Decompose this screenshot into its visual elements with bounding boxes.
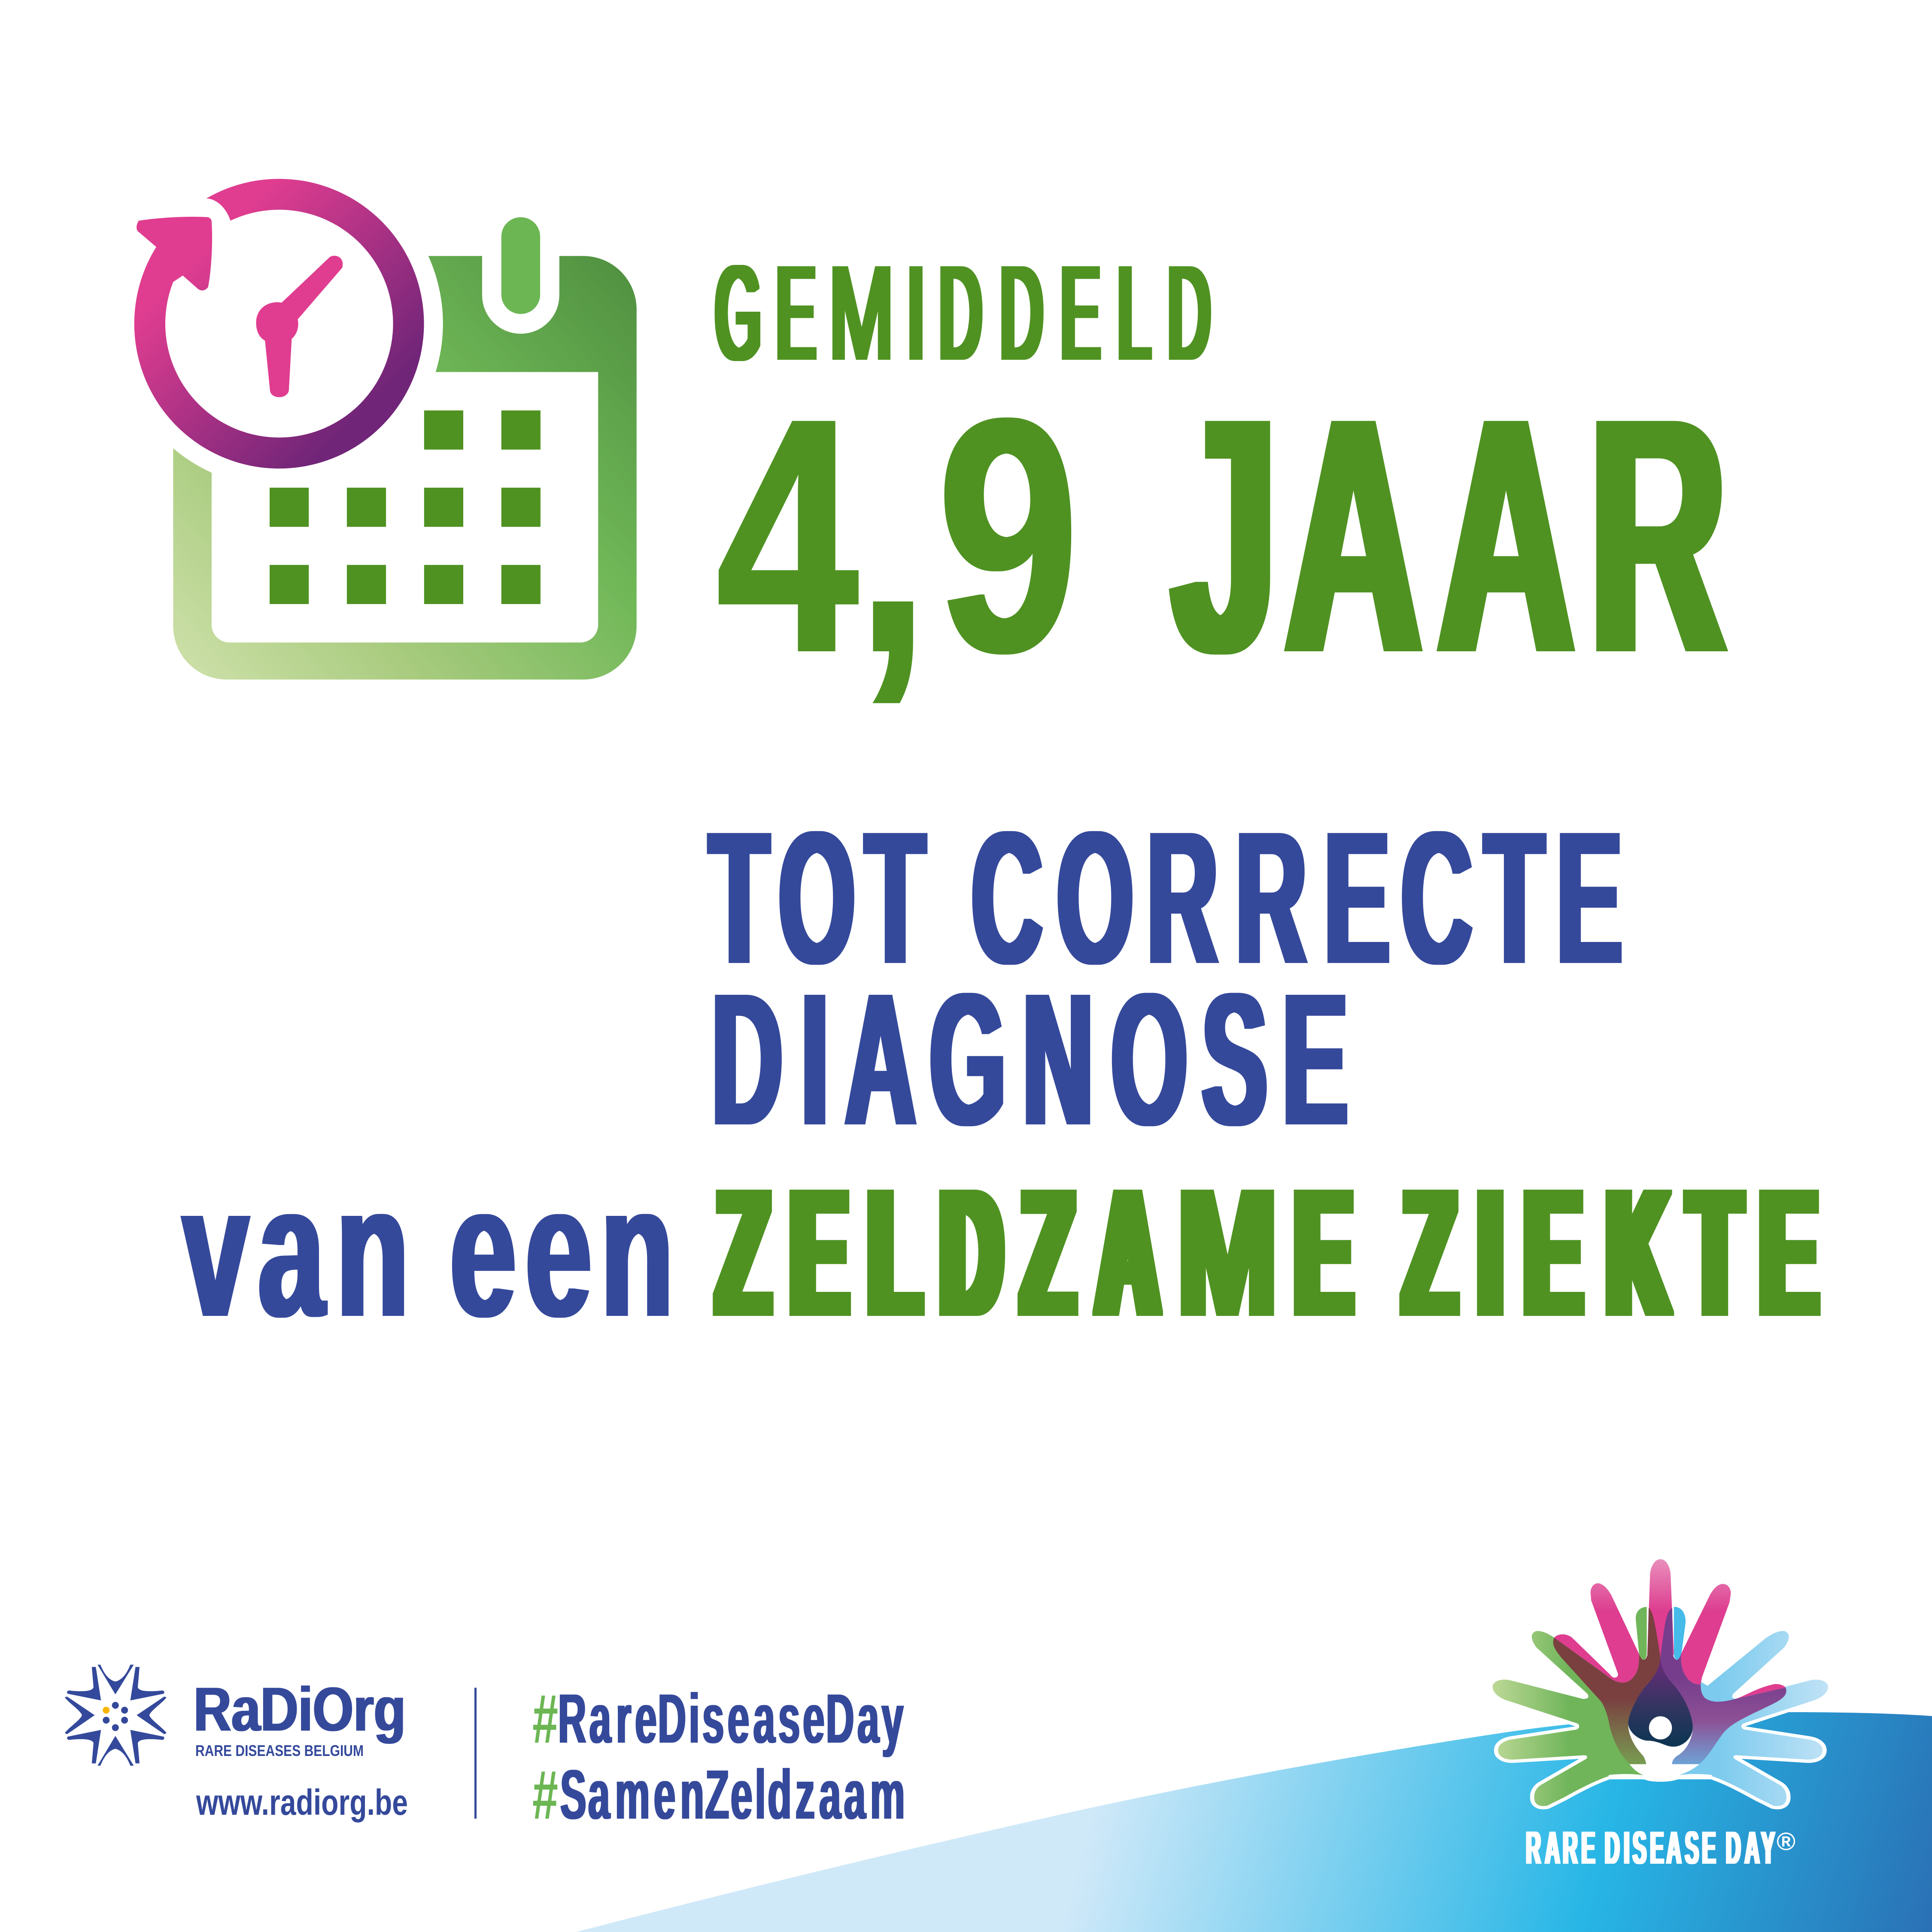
bottom swoosh	[576, 1712, 1932, 1932]
calendar pin	[501, 217, 540, 314]
logo: RaDiOrg wordmark: RaDiOrg	[194, 1674, 406, 1744]
calendar cut-outs	[115, 160, 559, 487]
logo: RaDiOrg star	[65, 1665, 167, 1766]
hashtag: SamenZeldzaam: SamenZeldzaam	[560, 1755, 905, 1834]
logo text: Rare Disease Day: RARE DISEASE DAY	[1526, 1822, 1775, 1874]
white lower outline	[1609, 1776, 1712, 1780]
text: diagnose: DIAGNOSE	[712, 954, 1348, 1165]
clock hands	[256, 256, 343, 397]
icon: calendar with clock	[115, 160, 637, 680]
hashtag: SamenZeldzaam: #	[532, 1756, 558, 1834]
figure head	[1649, 1716, 1672, 1740]
heading: gemiddeld: GE	[716, 240, 815, 387]
teardrop figure	[1628, 1657, 1693, 1747]
hashtag: RareDiseaseDay: #	[532, 1680, 558, 1758]
divider	[474, 1688, 477, 1819]
text: zeldzame ziekte: E ZIEKTE	[1295, 1154, 1817, 1352]
calendar body	[173, 256, 637, 680]
heading: 4,9 jaar: 4,9	[717, 348, 1078, 723]
text: zeldzame ziekte: M	[1178, 1153, 1277, 1352]
logo: Rare Disease Day hands	[1493, 1559, 1828, 1806]
brown overlap	[1553, 1608, 1661, 1764]
blue finger	[1674, 1607, 1686, 1660]
heading: gemiddeld: M	[829, 239, 894, 387]
right hand	[1660, 1631, 1828, 1806]
left hand	[1493, 1631, 1661, 1806]
purple overlap	[1661, 1608, 1786, 1764]
calendar day squares	[270, 410, 541, 604]
green finger	[1636, 1607, 1647, 1660]
text: van een: van een	[182, 1145, 673, 1357]
text: zeldzame ziekte: ZELDZA	[717, 1154, 1158, 1352]
white body	[1628, 1723, 1699, 1779]
text: tot correcte: TOT CORRECTE	[709, 793, 1622, 1003]
text: zeldzame ziekte	[717, 1153, 1817, 1352]
heading: gemiddeld: IDDELD	[908, 240, 1210, 387]
pink hand fingers	[1554, 1559, 1786, 1699]
hashtag: RareDiseaseDay: RareDiseaseDay	[558, 1679, 903, 1758]
logo: tagline: RARE DISEASES BELGIUM	[195, 1742, 364, 1759]
heading: gemiddeld	[716, 239, 1210, 387]
logo text: Rare Disease Day: ®	[1777, 1828, 1795, 1856]
website url: www.radiorg.be	[196, 1782, 408, 1823]
heading: 4,9 jaar	[717, 348, 1726, 723]
clock ring with arrow	[134, 179, 424, 468]
heading: 4,9 jaar: JAAR	[1172, 349, 1726, 723]
